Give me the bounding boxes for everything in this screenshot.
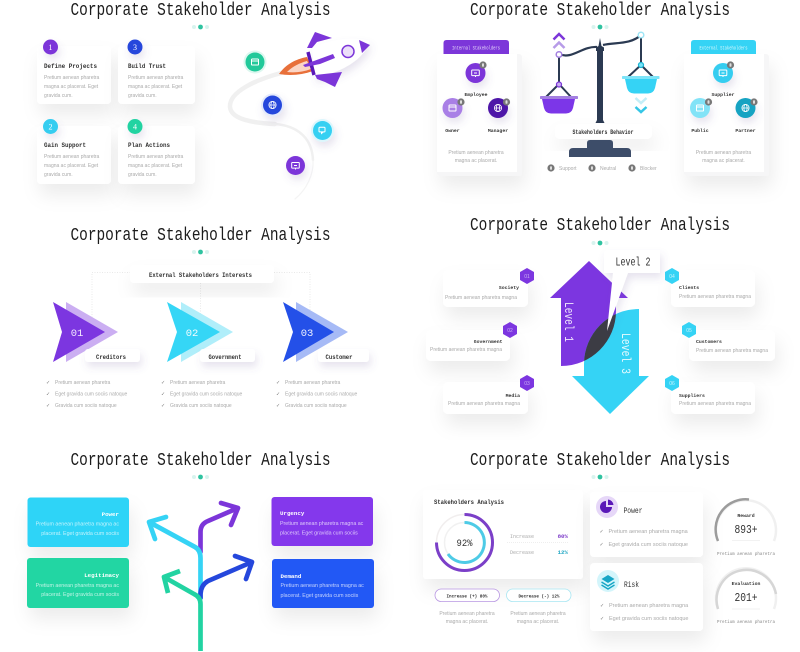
card: define projects: magna ac placerat. Eget <box>44 84 99 90</box>
card: define projects: Define Projects <box>44 63 97 70</box>
title: Corporate Stakeholder Analysis <box>70 0 330 21</box>
card: internal stakeholders: Pretium aenean pharetra <box>448 150 504 156</box>
list column 1: ✓ <box>46 403 50 409</box>
gauge: reward <box>716 499 776 557</box>
card: risk: Pretium aenean pharetra magna <box>609 603 689 609</box>
card: power <box>28 498 129 547</box>
card 01 society: Society <box>499 285 519 291</box>
pill: increase: Pretium aenean pharetra <box>439 611 495 617</box>
card: power <box>590 492 703 557</box>
arrow: cyan branch <box>149 517 200 598</box>
arrow group 02 government: 02 <box>186 328 198 340</box>
pill: decrease: magna ac placerat. <box>517 619 559 625</box>
list column 3 <box>276 380 357 409</box>
card: donut analysis: 80% <box>558 533 569 540</box>
list column 2: Pretium aenean pharetra <box>170 380 226 386</box>
list column 2 <box>161 380 242 409</box>
pill: decrease: Decrease (-) 12% <box>518 594 560 600</box>
number badge 3: 3 <box>133 43 137 52</box>
card 06 suppliers: Pretium aenean pharetra magna <box>679 401 751 407</box>
card header: Internal Stakeholders <box>452 46 500 52</box>
gauge: evaluation <box>716 568 776 625</box>
list column 1 <box>46 380 127 409</box>
arrow group 01 creditors: 01 <box>71 328 83 340</box>
title: Corporate Stakeholder Analysis <box>470 450 730 471</box>
card: donut analysis: Decrease <box>510 550 534 556</box>
card: power: Power <box>624 506 642 516</box>
card: external stakeholders <box>684 40 769 176</box>
list column 2: ✓ <box>161 380 165 386</box>
list column 3: ✓ <box>276 392 280 398</box>
card: legitimacy: placerat. Eget gravida cum sociis <box>41 592 119 598</box>
card: legitimacy: Pretium aenean pharetra magna ac <box>36 583 119 589</box>
card 01 society: 01 <box>524 274 530 280</box>
donut chart <box>436 514 493 570</box>
list column 3: Gravida cum sociis natoque <box>285 403 347 409</box>
card: external stakeholders: magna ac placerat. <box>702 158 745 164</box>
card: plan actions: Plan Actions <box>128 142 170 149</box>
title: Corporate Stakeholder Analysis <box>470 0 730 21</box>
card: legitimacy: Legitimacy <box>84 572 120 579</box>
scale base <box>569 140 631 157</box>
panel: levels <box>426 215 775 414</box>
title: Corporate Stakeholder Analysis <box>70 450 330 471</box>
icon: layers <box>597 570 619 592</box>
card: build trust: Pretium aenean pharetra <box>128 75 184 81</box>
pagination dots <box>192 475 209 479</box>
card: define projects: gravida cum. <box>44 93 73 99</box>
panel: scales of stakeholders <box>437 0 769 176</box>
card 05 customers: Pretium aenean pharetra magna <box>696 348 768 354</box>
icon: rocket <box>279 32 370 87</box>
arrow group 01 creditors <box>53 302 140 362</box>
card: gain support: Gain Support <box>44 142 86 149</box>
chevrons down <box>636 98 646 112</box>
card 03 media: Media <box>506 393 520 399</box>
card 04 clients: Pretium aenean pharetra magna <box>679 294 751 300</box>
list column 3: Pretium aenean pharetra <box>285 380 341 386</box>
node: supplier: Supplier <box>711 92 735 98</box>
arrow: level 3 down: Level 3 <box>618 333 632 374</box>
label card: stakeholders behavior <box>555 124 652 139</box>
list column 1: Gravida cum sociis natoque <box>55 403 117 409</box>
list column 3: Eget gravida cum sociis natoque <box>285 392 357 398</box>
gauge: evaluation: 201+ <box>734 591 758 605</box>
card: demand <box>272 559 374 608</box>
label card: stakeholders behavior: Stakeholders Behavior <box>572 129 634 136</box>
legend: Support <box>559 166 577 172</box>
list column 3: ✓ <box>276 380 280 386</box>
card: gain support: gravida cum. <box>44 172 73 178</box>
card 06 suppliers <box>665 375 755 414</box>
card: power: Pretium aenean pharetra magna <box>608 529 689 535</box>
card 03 media: 03 <box>524 381 530 387</box>
list column 3: ✓ <box>276 403 280 409</box>
list column 1: Pretium aenean pharetra <box>55 380 111 386</box>
card: build trust <box>118 40 195 104</box>
card: risk: Eget gravida cum sociis natoque <box>609 616 688 622</box>
card: donut analysis <box>423 490 583 579</box>
node: partner: Partner <box>735 128 756 134</box>
list column 1: ✓ <box>46 380 50 386</box>
node: employee: Employee <box>464 92 488 98</box>
list column 2: Eget gravida cum sociis natoque <box>170 392 242 398</box>
number badge 2: 2 <box>48 122 52 132</box>
pagination dots <box>192 250 209 254</box>
list column 2: Gravida cum sociis natoque <box>170 403 232 409</box>
card 04 clients <box>665 268 755 307</box>
right pan <box>622 32 660 94</box>
arrow group 03 customer: Customer <box>326 354 353 361</box>
pill: increase: magna ac placerat. <box>446 619 488 625</box>
left pan <box>540 52 578 114</box>
card: internal stakeholders: magna ac placerat. <box>455 158 497 164</box>
arrow group 03 customer: 03 <box>301 328 313 340</box>
rocket trail <box>230 73 313 199</box>
arrow group 02 government <box>167 302 255 362</box>
icon: chat node <box>311 119 334 142</box>
scale post <box>596 38 604 123</box>
card: urgency: Urgency <box>280 510 305 517</box>
card 03 media <box>443 375 534 414</box>
card: define projects <box>37 40 111 104</box>
tree of arrows <box>149 503 252 651</box>
panel: stakeholder metrics <box>423 450 776 631</box>
card: risk: ✓ <box>600 603 604 609</box>
node: manager: Manager <box>488 128 508 134</box>
list column 1: ✓ <box>46 392 50 398</box>
number badge 4: 4 <box>133 122 137 132</box>
card 04 clients: 04 <box>669 274 675 280</box>
heading card: External Stakeholders Interests <box>149 272 252 279</box>
node: owner: Owner <box>445 128 460 134</box>
card 03 media: Pretium aenean pharetra magna <box>448 401 520 407</box>
card: plan actions <box>118 119 195 184</box>
arrow: level 1 up <box>550 261 628 366</box>
card: risk: ✓ <box>600 616 604 622</box>
arrow: green branch <box>164 571 200 651</box>
card: legitimacy <box>27 558 129 608</box>
icon: screen node <box>286 156 305 175</box>
arrow: blue branch <box>200 556 252 598</box>
title: Corporate Stakeholder Analysis <box>470 215 730 236</box>
pagination dots <box>592 241 608 245</box>
card: internal stakeholders <box>437 40 522 176</box>
pagination dots <box>192 25 209 29</box>
card 02 government <box>426 322 517 361</box>
list column 2: ✓ <box>161 392 165 398</box>
arrow: purple branch <box>200 503 238 552</box>
icon: pie <box>596 496 618 518</box>
card: define projects: Pretium aenean pharetra <box>44 75 100 81</box>
card: donut analysis: 12% <box>558 549 569 556</box>
chevrons up <box>554 34 564 48</box>
card 05 customers: Customers <box>696 339 722 345</box>
card 06 suppliers: 06 <box>669 381 675 387</box>
card header: External Stakeholders <box>700 46 748 52</box>
card: gain support: Pretium aenean pharetra <box>44 154 100 160</box>
card 04 clients: Clients <box>679 285 699 291</box>
card: power: Pretium aenean pharetra magna ac <box>36 522 119 528</box>
card: external stakeholders: Pretium aenean pharetra <box>696 150 751 156</box>
pill: increase <box>435 589 500 625</box>
pill: increase: Increase (+) 80% <box>446 594 488 600</box>
card: plan actions: magna ac placerat. Eget <box>128 163 183 169</box>
legend: Blocker <box>640 166 657 172</box>
pagination dots <box>592 25 608 29</box>
callout: level 2: Level 2 <box>616 256 650 270</box>
card: risk <box>590 563 703 631</box>
card 05 customers: 05 <box>686 328 692 334</box>
scale beam <box>559 35 641 56</box>
card 05 customers <box>682 322 775 361</box>
gauge: reward: 893+ <box>734 523 758 537</box>
card 01 society: Pretium aenean pharetra magna <box>445 295 517 301</box>
number badge 1: 1 <box>48 43 52 52</box>
arrow group 02 government: Government <box>208 354 242 361</box>
node: public: Public <box>691 128 709 134</box>
card: build trust: Build Trust <box>128 63 166 70</box>
card: gain support <box>37 119 111 184</box>
gauge: reward: Reward <box>737 513 755 519</box>
card: build trust: gravida cum. <box>128 93 157 99</box>
gauge: reward: Pretium aenean pharetra <box>717 551 775 557</box>
card 06 suppliers: Suppliers <box>679 393 705 399</box>
card: demand: Demand <box>280 573 302 580</box>
gauge: evaluation: Evaluation <box>732 581 761 587</box>
card: donut analysis: Stakeholders Analysis <box>434 499 504 506</box>
card: donut analysis: Increase <box>510 534 534 540</box>
card: demand: Pretium aenean pharetra magna ac <box>280 583 364 589</box>
card: urgency: Pretium aenean pharetra magna ac <box>280 521 364 527</box>
card 02 government: 02 <box>507 328 513 334</box>
card 01 society <box>443 268 534 307</box>
icon: card node <box>244 50 266 74</box>
card: plan actions: gravida cum. <box>128 172 157 178</box>
arrow group 03 customer <box>283 302 369 362</box>
legend <box>547 164 657 172</box>
pagination dots <box>592 475 608 479</box>
card: risk: Risk <box>624 580 639 590</box>
card: urgency <box>272 497 373 546</box>
card: urgency: placerat. Eget gravida cum sociis <box>280 530 358 536</box>
card: power: placerat. Eget gravida cum sociis <box>41 531 119 537</box>
card 02 government: Government <box>474 339 503 345</box>
pill: decrease: Pretium aenean pharetra <box>510 611 566 617</box>
balance scale <box>540 32 660 157</box>
card: plan actions: Pretium aenean pharetra <box>128 154 184 160</box>
card: power: Power <box>102 511 120 518</box>
list column 1: Eget gravida cum sociis natoque <box>55 392 127 398</box>
panel: external stakeholders interests <box>46 225 369 409</box>
card: donut analysis: 92% <box>456 539 472 550</box>
card: build trust: magna ac placerat. Eget <box>128 84 183 90</box>
arrow group 01 creditors: Creditors <box>96 354 126 361</box>
arrow: level 3 down <box>572 309 649 414</box>
icon: globe node <box>261 94 284 116</box>
panel: branching arrows <box>27 450 374 651</box>
arrow: level 1 up: Level 1 <box>561 302 575 342</box>
card: demand: placerat. Eget gravida cum sociis <box>280 593 359 599</box>
card: power: ✓ <box>600 542 604 548</box>
card: gain support: magna ac placerat. Eget <box>44 163 99 169</box>
panel: define, build, gain, plan <box>37 0 370 199</box>
card: power: ✓ <box>600 529 604 535</box>
pill: decrease <box>506 589 571 625</box>
list column 2: ✓ <box>161 403 165 409</box>
heading card <box>130 265 274 283</box>
card: power: Eget gravida cum sociis natoque <box>608 542 688 548</box>
title: Corporate Stakeholder Analysis <box>70 225 330 246</box>
callout: level 2 <box>604 250 660 331</box>
legend: Neutral <box>600 166 616 172</box>
gauge: evaluation: Pretium aenean pharetra <box>717 619 775 625</box>
card 02 government: Pretium aenean pharetra magna <box>430 347 502 353</box>
